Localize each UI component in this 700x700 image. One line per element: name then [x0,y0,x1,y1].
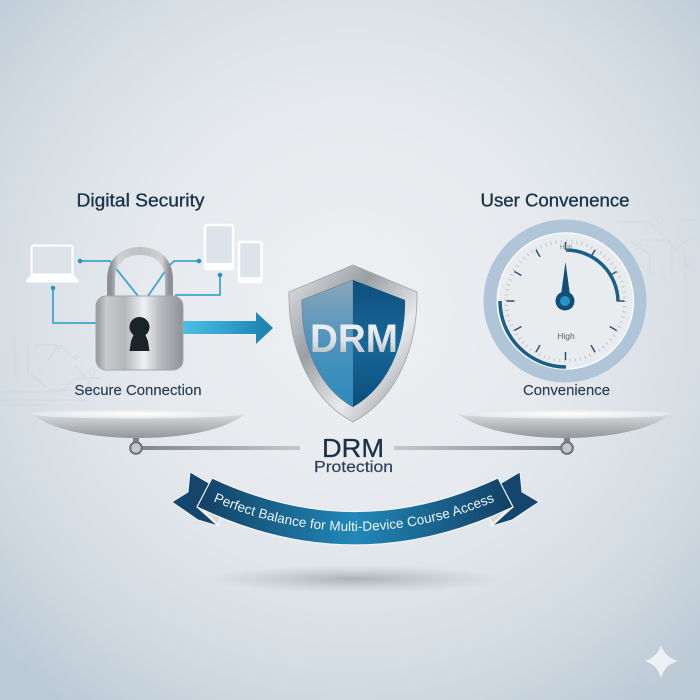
label: DRM: DRM [322,433,384,463]
icon: sparkle [645,645,678,678]
heading: User Convenence: User Convenence [480,190,630,210]
icon: phone [238,242,262,283]
icon: padlock [96,251,183,370]
arrow [183,312,273,344]
heading: Digital Security: Digital Security [76,190,204,210]
icon: laptop [26,246,79,282]
label: Protection: Protection [314,459,393,476]
icon: DRM shield: DRM [310,317,398,361]
circuit pattern: right [616,217,698,280]
circuit pattern: left [0,335,100,405]
ribbon banner [172,472,540,546]
beam pivot: right [561,442,573,454]
ribbon banner: Perfect Balance for Multi-Device Course Access [214,493,494,532]
label: Convenience: Convenience [523,383,610,399]
icon: speed gauge [490,226,640,376]
label: Secure Connection: Secure Connection [74,383,202,399]
icon: speed gauge: High [557,331,575,341]
balance beam: right [394,446,562,450]
ground shadow [205,565,505,593]
icon: tablet [204,225,234,270]
icon: DRM shield [289,265,417,422]
connector lines [51,259,222,323]
scale plate: left [32,409,245,442]
icon: speed gauge: High [560,245,572,251]
scale plate: right [458,409,671,442]
beam pivot: left [130,442,142,454]
balance beam: left [142,446,300,450]
